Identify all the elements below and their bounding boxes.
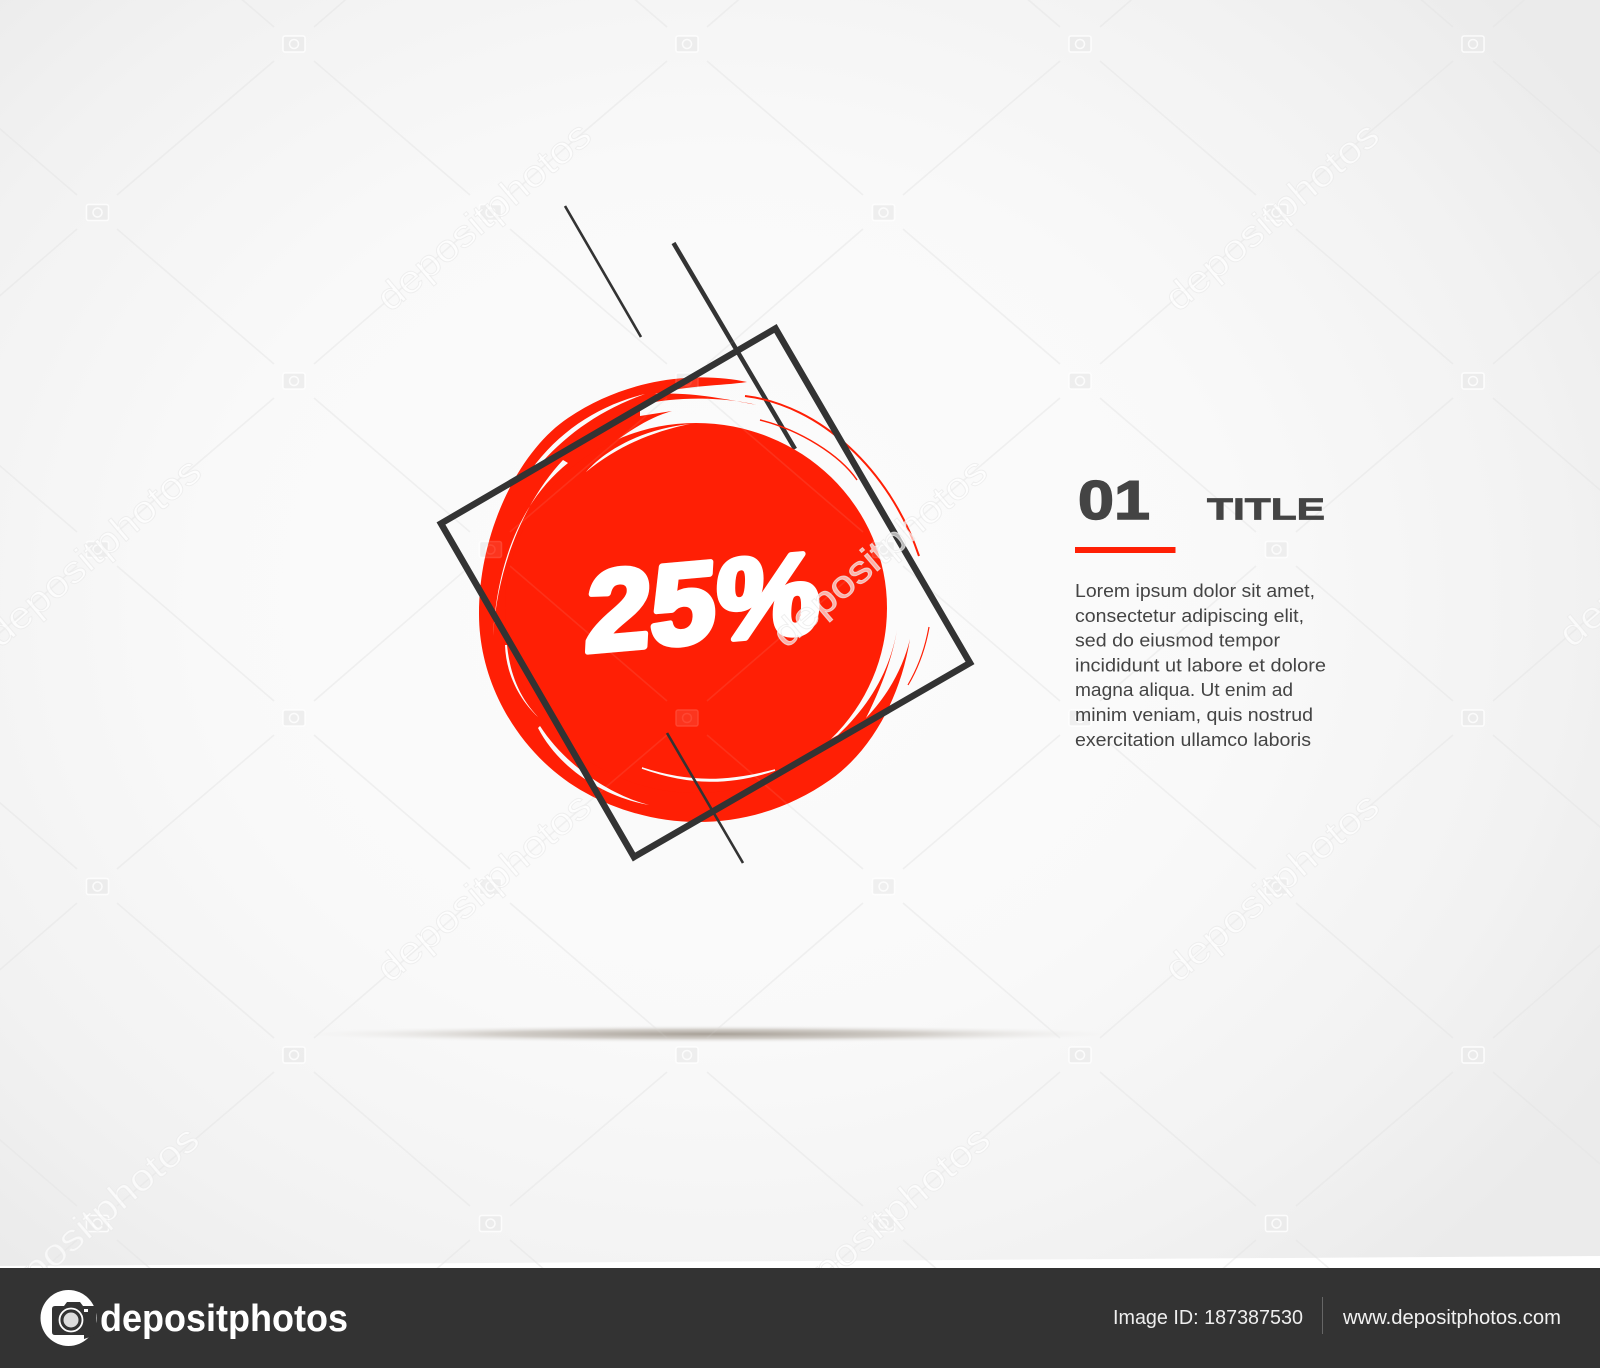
watermark text: depositphotos — [1157, 785, 1388, 991]
rotated square frame — [441, 328, 970, 857]
red brush circle — [479, 243, 929, 822]
body text: magna aliqua. Ut enim ad — [1075, 679, 1293, 700]
watermark text: depositphotos — [768, 1118, 999, 1324]
short line bottom — [667, 733, 743, 863]
disc highlights — [586, 424, 775, 781]
thin red brush arcs — [745, 396, 929, 685]
body text: exercitation ullamco laboris — [1075, 729, 1311, 750]
logo wordmark: depositphotos — [100, 1298, 348, 1340]
body text: minim veniam, quis nostrud — [1075, 704, 1313, 725]
floor shadow — [284, 1025, 1134, 1043]
watermark text: depositphotos — [765, 450, 996, 656]
icon: camera logo — [40, 1290, 96, 1346]
main red disc — [505, 423, 887, 793]
long dark line behind disc — [674, 243, 795, 449]
body text: Lorem ipsum dolor sit amet, — [1075, 580, 1315, 601]
body text — [1075, 580, 1326, 750]
watermark text: depositphotos — [369, 785, 600, 991]
body text: consectetur adipiscing elit, — [1075, 605, 1304, 626]
short line top — [565, 206, 641, 337]
brush blob — [479, 377, 910, 822]
body text: sed do eiusmod tempor — [1075, 630, 1280, 651]
heading: title: TITLE — [1207, 492, 1325, 526]
percentage value: 25% — [583, 528, 824, 677]
body text: incididunt ut labore et dolore — [1075, 654, 1326, 675]
watermark text: depositphotos — [1157, 114, 1388, 320]
watermark text: depositphotos — [369, 114, 600, 320]
red underline — [1075, 547, 1176, 553]
brush gaps — [493, 394, 649, 805]
number 01: 01 — [1078, 469, 1150, 531]
image id: Image ID: 187387530 — [1113, 1307, 1303, 1329]
footer divider — [1322, 1297, 1323, 1334]
footer bar — [0, 1268, 1600, 1368]
website url: www.depositphotos.com — [1342, 1307, 1561, 1329]
